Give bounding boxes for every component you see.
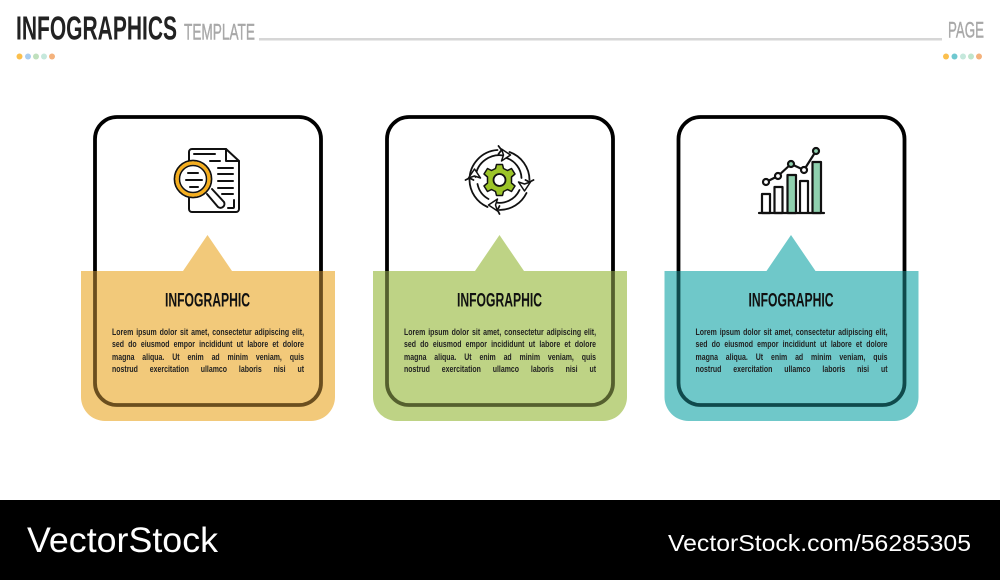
card body text: nostrud exercitation ullamco laboris nisi ut xyxy=(696,364,888,375)
card body text: nostrud exercitation ullamco laboris nisi ut xyxy=(404,364,596,375)
card body text: sed do eiusmod empor incididunt ut labore et dolore xyxy=(404,339,596,350)
header: left title xyxy=(16,10,255,48)
left decorative dots xyxy=(16,54,55,60)
icon: document with magnifier xyxy=(174,149,239,212)
right decorative dots xyxy=(943,54,982,60)
icon: bar chart with trend line xyxy=(759,148,824,213)
card body text xyxy=(696,327,888,379)
card heading: INFOGRAPHIC xyxy=(165,290,250,312)
card body text: nostrud exercitation ullamco laboris nisi ut xyxy=(112,364,304,375)
panel: card 1 orange xyxy=(81,117,335,421)
icon: gear with circular arrows xyxy=(466,146,534,214)
card heading: INFOGRAPHIC xyxy=(457,290,542,312)
card body text: magna aliqua. Ut enim ad minim veniam, quis xyxy=(696,352,888,363)
card heading: INFOGRAPHIC xyxy=(748,290,834,312)
card body text: magna aliqua. Ut enim ad minim veniam, quis xyxy=(112,352,304,363)
footer logo text: VectorStock xyxy=(27,521,219,560)
card body text: Lorem ipsum dolor sit amet, consectetur adipiscing elit, xyxy=(404,327,596,338)
panel: card 3 teal xyxy=(664,117,918,421)
card body text xyxy=(404,327,596,379)
card body text: sed do eiusmod empor incididunt ut labore et dolore xyxy=(112,339,304,350)
panel: card 2 green xyxy=(373,117,627,421)
subtitle: TEMPLATE xyxy=(184,20,255,44)
card body text xyxy=(112,327,304,379)
card body text: sed do eiusmod empor incididunt ut labore et dolore xyxy=(696,339,888,350)
title: INFOGRAPHICS xyxy=(16,10,177,48)
card body text: magna aliqua. Ut enim ad minim veniam, quis xyxy=(404,352,596,363)
footer bar xyxy=(0,500,1000,580)
footer url: VectorStock.com/56285305 xyxy=(668,530,971,556)
card body text: Lorem ipsum dolor sit amet, consectetur adipiscing elit, xyxy=(696,327,888,338)
card body text: Lorem ipsum dolor sit amet, consectetur adipiscing elit, xyxy=(112,327,304,338)
